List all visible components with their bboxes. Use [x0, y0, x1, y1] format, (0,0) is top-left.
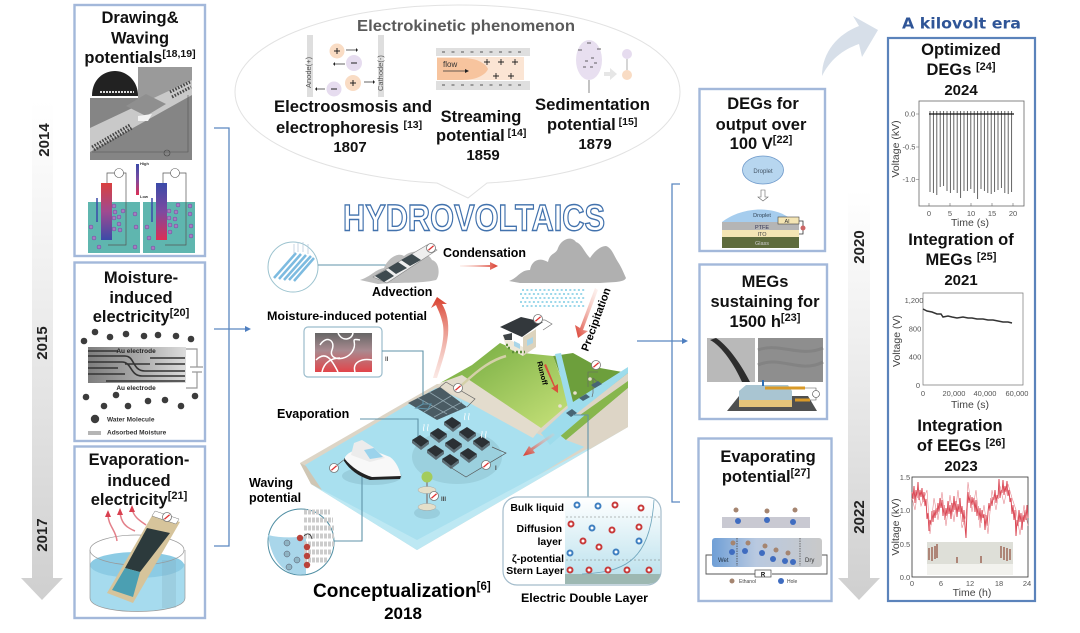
panel: MEGs sustaining for 1500 h	[700, 264, 827, 419]
label: condensation: Condensation	[443, 246, 526, 260]
chart: EEG voltage over 24 h	[890, 473, 1031, 599]
diagram: wet and dry channel: R	[761, 572, 766, 578]
heading: moisture-induced electricity: [20]	[170, 307, 190, 319]
chart: DEG voltage spikes: 5	[948, 209, 952, 218]
heading: drawing and waving potentials: potentials	[84, 49, 162, 67]
heading: integration of EEGs 2023: 2023	[944, 458, 978, 475]
illustration: hydrological cycle landscape	[249, 239, 661, 585]
inset: moisture-induced potential	[304, 327, 423, 400]
chart: EEG voltage over 24 h: 0.0	[900, 573, 910, 582]
timeline arrow: left	[21, 100, 63, 600]
layer labels: ζ-potential	[512, 553, 564, 565]
chart: MEG voltage decay: Voltage (V)	[891, 315, 903, 367]
ions	[568, 502, 652, 572]
label: electric double layer: Electric Double Layer	[521, 593, 649, 605]
label: electroosmosis and electrophoresis 1807: electrophoresis	[276, 119, 399, 137]
illustration: beaker with evaporating strip	[90, 505, 185, 612]
diagram: interdigitated Au electrodes with water molecules: Adsorbed Moisture	[107, 430, 167, 436]
heading: DEGs for output over 100 V: DEGs for	[727, 95, 799, 113]
chart: MEG voltage decay: 800	[909, 324, 921, 334]
diagram: droplet on PTFE/ITO/glass: PTFE	[755, 225, 769, 231]
chart: DEG voltage spikes: 0	[927, 209, 931, 218]
year 2017: 2017	[34, 518, 51, 552]
chart: EEG voltage over 24 h: 12	[966, 579, 974, 588]
chart: DEG voltage spikes	[890, 101, 1024, 229]
image: charged electrodes drawn in and out of water: High	[140, 161, 149, 166]
heading: integration of EEGs 2023: Integration	[917, 417, 1003, 435]
panel: DEGs for output over 100 V	[700, 89, 825, 251]
panel: electric double layer	[503, 497, 661, 585]
speech bubble: electrokinetic phenomenon	[235, 5, 680, 198]
heading: integration of EEGs 2023: [26]	[986, 437, 1006, 449]
heading: optimized DEGs 2024: DEGs	[926, 61, 971, 79]
heading: integration of EEGs 2023: of EEGs	[917, 437, 981, 455]
heading: optimized DEGs 2024: Optimized	[921, 41, 1001, 59]
heading: DEGs for output over 100 V: [22]	[773, 134, 793, 146]
arrow: return flow	[523, 433, 555, 456]
image: charged electrodes drawn in and out of water: Low	[140, 194, 149, 199]
heading: moisture-induced electricity: induced	[109, 289, 173, 307]
chart: MEG voltage decay: 60,000	[1006, 389, 1028, 398]
icon: fibers in water	[268, 242, 400, 292]
arrow: condensation	[460, 262, 498, 270]
heading: evaporation-induced electricity: induced	[107, 472, 171, 490]
diagram: interdigitated Au electrodes with water molecules	[81, 329, 203, 436]
landscape block	[300, 343, 628, 550]
chart: EEG voltage over 24 h: 6	[939, 579, 943, 588]
panel: moisture-induced electricity	[74, 262, 205, 441]
chart: EEG voltage over 24 h: Voltage (kV)	[890, 498, 902, 556]
connector: hydrovoltaics to right panels	[637, 184, 688, 502]
label: waving potential: Waving	[249, 476, 293, 490]
arrow: precipitation	[575, 288, 598, 338]
heading: evaporation-induced electricity: [21]	[168, 490, 188, 502]
heading: electrokinetic phenomenon: Electrokinetic phenomenon	[357, 18, 575, 35]
label: precipitation: Precipitation	[580, 286, 614, 353]
heading: DEGs for output over 100 V	[716, 95, 807, 153]
chart: MEG voltage decay: 400	[909, 352, 921, 362]
heading: drawing and waving potentials	[84, 9, 196, 67]
heading: integration of MEGs 2021: MEGs	[926, 251, 972, 269]
heading: conceptualization 2018: 2018	[384, 604, 422, 623]
label: streaming potential 1859	[436, 108, 526, 164]
diagram: droplet on PTFE/ITO/glass: Al	[785, 219, 789, 225]
heading: DEGs for output over 100 V: output over	[716, 116, 807, 134]
label: electroosmosis and electrophoresis 1807: Electroosmosis and	[274, 98, 432, 116]
heading: integration of MEGs 2021	[908, 231, 1014, 289]
panel: a kilovolt era	[888, 38, 1035, 601]
panel: evaporation-induced electricity	[74, 446, 205, 618]
chart: EEG voltage over 24 h: 24	[1023, 579, 1031, 588]
heading: drawing and waving potentials: Waving	[111, 30, 169, 48]
label: waving potential: potential	[249, 491, 301, 505]
label: streaming potential 1859: Streaming	[441, 108, 521, 126]
heading: optimized DEGs 2024: 2024	[944, 82, 978, 99]
label: sedimentation potential 1879	[535, 96, 650, 153]
heading: drawing and waving potentials: Drawing&	[101, 9, 179, 27]
chart: MEG voltage decay: Time (s)	[951, 399, 989, 411]
label: sedimentation potential 1879: 1879	[578, 136, 612, 153]
icon: rain cloud	[509, 239, 626, 306]
label: sedimentation potential 1879: potential	[547, 116, 616, 134]
connector: left bracket to hydrovoltaics	[214, 128, 251, 546]
label: waving potential	[249, 476, 301, 505]
solar panels on hillside	[408, 382, 475, 420]
floating solar panel array: I	[495, 466, 497, 472]
chart: DEG voltage spikes: -0.5	[903, 142, 915, 152]
label: sedimentation potential 1879: [15]	[616, 116, 637, 128]
chart: EEG voltage over 24 h: 0	[910, 579, 914, 588]
icon: sedimentation particles	[576, 40, 632, 93]
icon: buoy generator: III	[441, 497, 446, 503]
heading: a kilovolt era: A kilovolt era	[902, 14, 1021, 32]
chart: EEG voltage over 24 h: 0.5	[900, 540, 910, 549]
icon: streaming flow channel	[436, 48, 530, 90]
icon: electroosmosis cell: Cathode(-)	[376, 55, 385, 91]
heading: evaporating potential: Evaporating	[720, 448, 816, 466]
diagram: droplet on PTFE/ITO/glass: Droplet	[753, 213, 771, 219]
diagram: droplet on PTFE/ITO/glass: ITO	[757, 232, 767, 238]
label: evaporation: Evaporation	[277, 407, 349, 421]
chart: MEG voltage decay: 20,000	[943, 389, 965, 398]
icon: boat	[330, 440, 402, 541]
icon: buoy generator	[414, 472, 446, 519]
arrow: runoff	[544, 364, 558, 393]
year 2015: 2015	[34, 326, 51, 360]
label: streaming potential 1859: [14]	[505, 127, 526, 139]
heading: conceptualization 2018: [6]	[477, 581, 491, 593]
chart: EEG voltage over 24 h: 1.0	[900, 506, 910, 515]
chart: EEG voltage over 24 h: Time (h)	[953, 587, 991, 599]
heading: integration of MEGs 2021: Integration of	[908, 231, 1014, 249]
layer labels: Diffusion	[516, 523, 562, 535]
inset: moisture-induced potential: II	[385, 357, 389, 363]
device diagram	[727, 380, 820, 411]
heading: moisture-induced electricity: electricity	[93, 308, 170, 326]
label: runoff: Runoff	[535, 360, 550, 386]
icon: advection cloud with panels	[360, 244, 439, 284]
heading: conceptualization 2018	[313, 581, 491, 623]
layer labels: layer	[537, 536, 562, 548]
image: droplet on graphene strip	[90, 67, 192, 160]
year 2014: 2014	[36, 123, 53, 157]
micrographs	[707, 338, 823, 382]
label: streaming potential 1859: potential	[436, 127, 505, 145]
heading: optimized DEGs 2024	[921, 41, 1001, 99]
layer labels: Stern Layer	[506, 565, 564, 577]
heading: MEGs sustaining for 1500 h: sustaining for	[710, 293, 820, 311]
chart: MEG voltage decay	[891, 293, 1028, 411]
chart: DEG voltage spikes: 15	[988, 209, 996, 218]
heading: evaporating potential: [27]	[791, 467, 810, 479]
diagram: wet and dry channel	[706, 508, 827, 585]
icon: house on hill	[500, 314, 552, 356]
heading: evaporation-induced electricity	[89, 451, 189, 509]
title: HYDROVOLTAICS: HYDROVOLTAICS	[343, 198, 605, 238]
heading: MEGs sustaining for 1500 h: [23]	[781, 312, 801, 324]
diagram: wet and dry channel: Ethanol	[739, 579, 756, 585]
heading: MEGs sustaining for 1500 h: 1500 h	[730, 313, 781, 331]
diagram: interdigitated Au electrodes with water molecules: Au electrode	[116, 348, 156, 355]
chart: DEG voltage spikes: 0.0	[905, 110, 915, 118]
chart: MEG voltage decay: 40,000	[974, 389, 996, 398]
label: advection: Advection	[372, 285, 432, 299]
layer labels	[506, 502, 564, 577]
chart: MEG voltage decay: 1,200	[905, 296, 923, 305]
inset: waving potential water interface	[268, 509, 334, 575]
heading: conceptualization 2018: Conceptualization	[313, 581, 477, 602]
label: electroosmosis and electrophoresis 1807: [13]	[403, 119, 422, 131]
chart: EEG voltage over 24 h: 1.5	[900, 473, 910, 482]
diagram: droplet on PTFE/ITO/glass: Glass	[755, 241, 769, 247]
chart: DEG voltage spikes: Time (s)	[951, 217, 989, 229]
diagram: wet and dry channel: Dry	[805, 558, 814, 564]
heading: evaporating potential: potential	[722, 468, 791, 486]
panel: evaporating potential	[698, 438, 832, 601]
arrow: rising moisture	[431, 297, 448, 378]
heading: evaporation-induced electricity: electricity	[91, 491, 168, 509]
diagram: wet and dry channel: Hole	[787, 579, 798, 585]
heading: MEGs sustaining for 1500 h	[710, 273, 820, 331]
heading: optimized DEGs 2024: [24]	[976, 61, 996, 73]
heading: DEGs for output over 100 V: 100 V	[730, 135, 773, 153]
diagram: droplet on PTFE/ITO/glass	[722, 156, 806, 248]
label: streaming potential 1859: 1859	[466, 147, 500, 164]
chart: DEG voltage spikes: 20	[1009, 209, 1017, 218]
chart: DEG voltage spikes: 10	[967, 209, 975, 218]
heading: evaporation-induced electricity: Evaporation-	[89, 451, 189, 469]
heading: integration of MEGs 2021: 2021	[944, 272, 978, 289]
chart: EEG voltage over 24 h: 18	[995, 579, 1003, 588]
diagram: droplet on PTFE/ITO/glass: Droplet	[753, 169, 773, 175]
heading: evaporating potential	[720, 448, 816, 486]
diagram: wet and dry channel: Wet	[718, 558, 729, 564]
chart: DEG voltage spikes: Voltage (kV)	[890, 120, 902, 178]
icon: electroosmosis cell	[304, 35, 385, 97]
label: sedimentation potential 1879: Sedimentation	[535, 96, 650, 114]
heading: integration of MEGs 2021: [25]	[977, 251, 997, 263]
heading: MEGs sustaining for 1500 h: MEGs	[742, 273, 788, 291]
diagram: interdigitated Au electrodes with water molecules: Water Molecule	[107, 416, 155, 424]
heading: integration of EEGs 2023	[917, 417, 1006, 475]
image: charged electrodes drawn in and out of water	[88, 161, 195, 253]
chart: DEG voltage spikes: -1.0	[903, 175, 915, 184]
label: electroosmosis and electrophoresis 1807	[274, 98, 432, 156]
chart: MEG voltage decay: 0	[916, 381, 920, 390]
icon: electroosmosis cell: Anode(+)	[304, 56, 313, 88]
diagram: interdigitated Au electrodes with water molecules: Au electrode	[116, 385, 156, 392]
year 2022: 2022	[851, 500, 868, 534]
layer labels: Bulk liquid	[510, 502, 564, 514]
label: electroosmosis and electrophoresis 1807: 1807	[333, 139, 367, 156]
arrow: toward kilovolt era	[822, 16, 878, 76]
floating solar panel array	[360, 413, 506, 484]
heading: moisture-induced electricity	[93, 269, 190, 326]
heading: drawing and waving potentials: [18,19]	[162, 48, 196, 60]
timeline arrow: right	[838, 190, 880, 600]
panel: drawing and waving potentials	[74, 5, 205, 256]
chart: MEG voltage decay: 0	[921, 389, 925, 398]
year 2020: 2020	[851, 230, 868, 264]
river sensors	[558, 360, 602, 497]
icon: streaming flow channel: flow	[443, 60, 457, 69]
label: moisture-induced potential: Moisture-induced potential	[267, 309, 427, 323]
heading: moisture-induced electricity: Moisture-	[104, 269, 178, 287]
